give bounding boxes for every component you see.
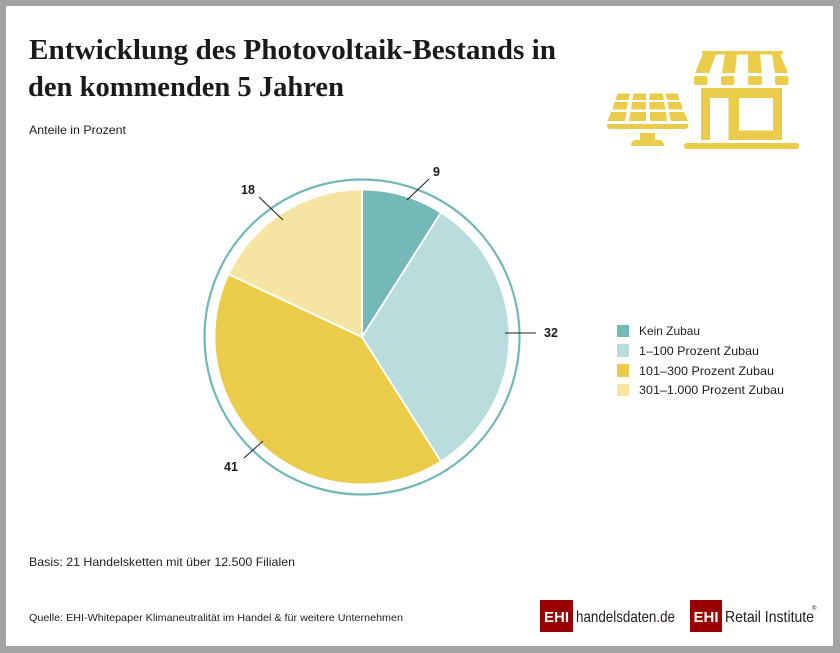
- slice: 1-100 Prozent Zubau 32: [362, 212, 509, 462]
- legend item: 101-300 Prozent Zubau: 101–300 Prozent Zubau: [639, 364, 774, 378]
- source note: Quelle: EHI-Whitepaper Klimaneutralität im Handel & für weitere Unternehmen: [29, 612, 403, 624]
- icon: solar panel and shop: [607, 51, 799, 149]
- value label 41: 41: [224, 460, 238, 474]
- title: Entwicklung des Photovoltaik-Bestands in: [29, 34, 556, 66]
- slice: Kein Zubau 9: [362, 190, 441, 337]
- value label 41: [224, 441, 263, 474]
- logo: EHI Retail Institute: Retail Institute: [725, 609, 814, 626]
- legend item: 1-100 Prozent Zubau: 1–100 Prozent Zubau: [639, 344, 759, 358]
- value label 9: [407, 165, 440, 200]
- value label 9: 9: [433, 165, 440, 179]
- logo: EHI Retail Institute: EHI: [693, 609, 719, 626]
- outer ring: [204, 180, 520, 494]
- basis note: Basis: 21 Handelsketten mit über 12.500 Filialen: [29, 555, 295, 569]
- legend item: 301-1.000 Prozent Zubau: 301–1.000 Prozent Zubau: [639, 383, 784, 397]
- value label 18: 18: [241, 183, 255, 197]
- title: [28, 34, 556, 103]
- slice: 301-1.000 Prozent Zubau 18: [228, 190, 362, 337]
- value label 18: [241, 183, 283, 220]
- logo: EHI handelsdaten.de: [540, 600, 675, 632]
- value label 32: 32: [544, 326, 558, 340]
- logo: EHI Retail Institute: ®: [812, 605, 817, 612]
- slice: 101-300 Prozent Zubau 41: [214, 274, 441, 484]
- logo: EHI handelsdaten.de: EHI: [544, 609, 569, 626]
- legend item: Kein Zubau: Kein Zubau: [639, 324, 700, 338]
- logo: EHI Retail Institute: [690, 600, 817, 632]
- value label 32: [505, 326, 558, 340]
- subtitle: Anteile in Prozent: [29, 123, 127, 137]
- legend: [617, 324, 784, 397]
- icon: shop: [684, 51, 799, 149]
- pie chart: [204, 180, 520, 494]
- icon: solar panel: [607, 94, 688, 146]
- title: den kommenden 5 Jahren: [28, 71, 344, 103]
- logo: EHI handelsdaten.de: handelsdaten.de: [576, 609, 675, 626]
